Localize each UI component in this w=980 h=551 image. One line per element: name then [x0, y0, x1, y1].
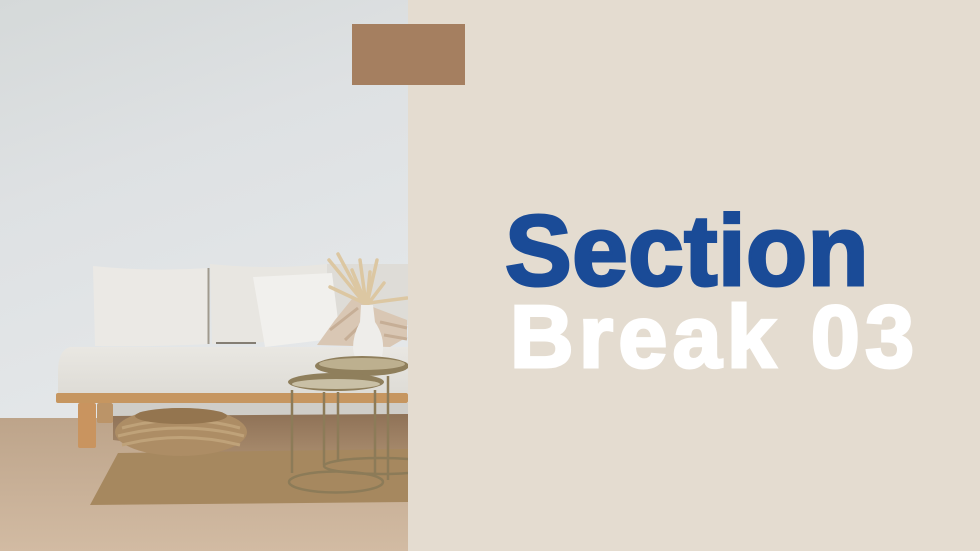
floor: [0, 418, 408, 551]
sofa frame: [56, 393, 408, 403]
rug: [90, 449, 408, 505]
wall base under sofa: [113, 403, 408, 416]
heading: Break 03: Break 03: [510, 287, 919, 386]
floor shadow under sofa: [113, 414, 408, 456]
heading: Section: Section: [505, 195, 869, 307]
wall: [0, 0, 408, 419]
white throw pillow: [253, 273, 340, 347]
sofa seat: [58, 347, 408, 393]
sofa legs: [78, 403, 113, 448]
decorative brown rectangle: [352, 24, 465, 85]
vase and dried flowers: [329, 254, 407, 365]
sofa back cushions: [93, 264, 408, 346]
panel: beige background: [408, 0, 980, 551]
striped pillow: [317, 299, 407, 347]
woven pouf: [115, 408, 247, 456]
panel: living room photo: [0, 0, 408, 551]
nesting side tables: [288, 356, 436, 492]
